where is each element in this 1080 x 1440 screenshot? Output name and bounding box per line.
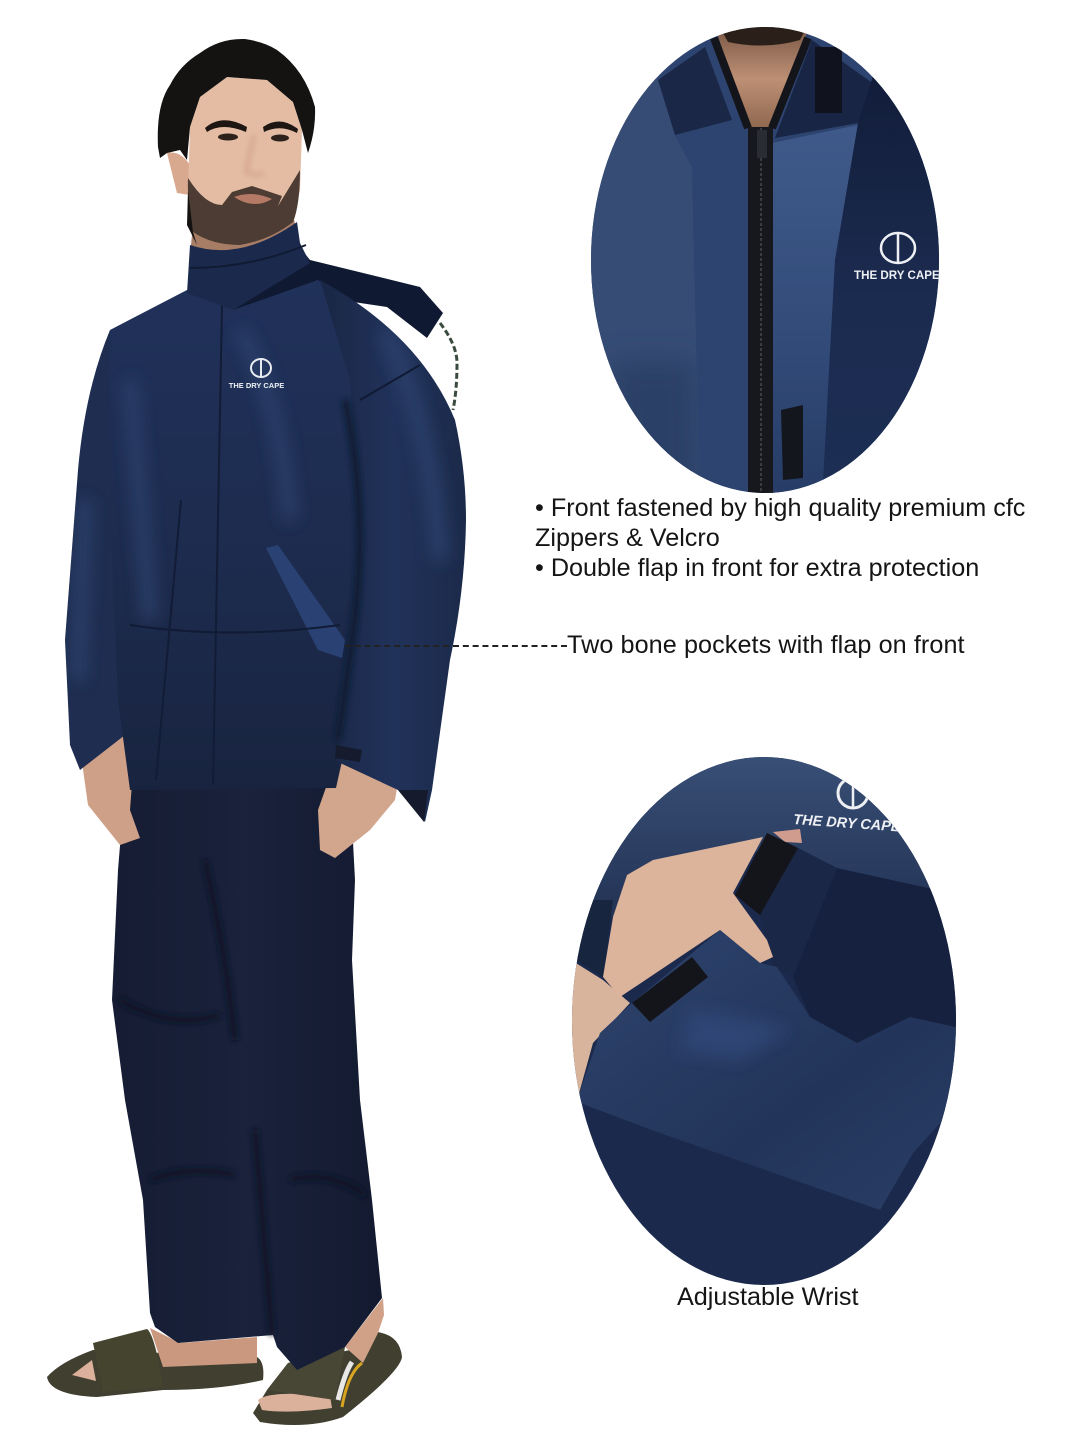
beard at top of oval xyxy=(724,27,804,46)
flap xyxy=(798,848,827,863)
velcro tabs xyxy=(815,47,842,113)
beard xyxy=(188,170,300,245)
upper velcro strip xyxy=(735,833,798,915)
left placket strip xyxy=(700,476,750,492)
left sleeve fabric xyxy=(591,78,700,476)
text block: front fastening features: • Front fastened by high quality premium cfc xyxy=(535,494,1025,522)
panel: zipper detail oval xyxy=(585,20,945,500)
jacket body xyxy=(108,280,375,790)
neck xyxy=(190,215,300,255)
logo: the dry cape on zipper detail: THE DRY CAPE xyxy=(854,269,940,282)
right hand xyxy=(318,762,400,858)
eyes and brows xyxy=(205,120,298,133)
text: wrist label: Adjustable Wrist xyxy=(677,1283,859,1311)
front placket xyxy=(156,305,222,785)
trousers xyxy=(112,785,382,1370)
panel: wrist detail oval xyxy=(555,750,970,1285)
throat xyxy=(716,30,808,128)
logo: the dry cape on zipper detail xyxy=(854,233,940,282)
jacket right sleeve xyxy=(320,280,466,822)
callout: pockets leader line xyxy=(345,645,567,647)
logo: the dry cape on wrist detail: THE DRY CAPE xyxy=(793,812,902,836)
right placket panel xyxy=(772,125,858,500)
fingernail xyxy=(773,829,802,843)
far right dark panel xyxy=(823,77,939,480)
icon: left slipper xyxy=(47,1328,263,1397)
hair xyxy=(158,39,315,160)
left hand xyxy=(80,730,140,845)
hood bundle xyxy=(222,245,443,338)
upper jacket fabric xyxy=(584,757,934,930)
drawcord xyxy=(440,323,457,410)
pocket flap xyxy=(266,545,345,658)
dark left shoulder panel xyxy=(658,47,732,135)
text block: front fastening features: Zippers & Velcro xyxy=(535,524,720,552)
icon: right slipper xyxy=(253,1298,402,1425)
forearm xyxy=(572,964,630,1092)
logo: the dry cape on chest: THE DRY CAPE xyxy=(229,381,284,390)
lower velcro strip xyxy=(632,957,708,1022)
fold lobe highlight xyxy=(682,1011,781,1060)
sleeve xyxy=(578,930,970,1210)
center zipper xyxy=(748,127,773,497)
hand xyxy=(603,837,773,997)
left dark fold xyxy=(577,900,613,977)
collar xyxy=(187,222,310,310)
dark right shoulder panel xyxy=(775,40,878,138)
logo: the dry cape on chest xyxy=(229,359,284,390)
cuff strap xyxy=(335,745,428,822)
photo: man wearing navy rain suit xyxy=(47,39,466,1425)
text: pockets label: Two bone pockets with flap on front xyxy=(567,631,965,659)
text block: front fastening features: • Double flap in front for extra protection xyxy=(535,554,979,582)
logo: the dry cape on wrist detail xyxy=(794,780,898,832)
jacket folds and highlights xyxy=(78,330,440,740)
face xyxy=(188,77,302,245)
right dark interior xyxy=(793,868,970,1043)
ear xyxy=(167,152,190,195)
text block: front fastening features xyxy=(535,494,1025,582)
zipper tapes xyxy=(714,38,808,128)
jacket left sleeve xyxy=(65,330,132,770)
